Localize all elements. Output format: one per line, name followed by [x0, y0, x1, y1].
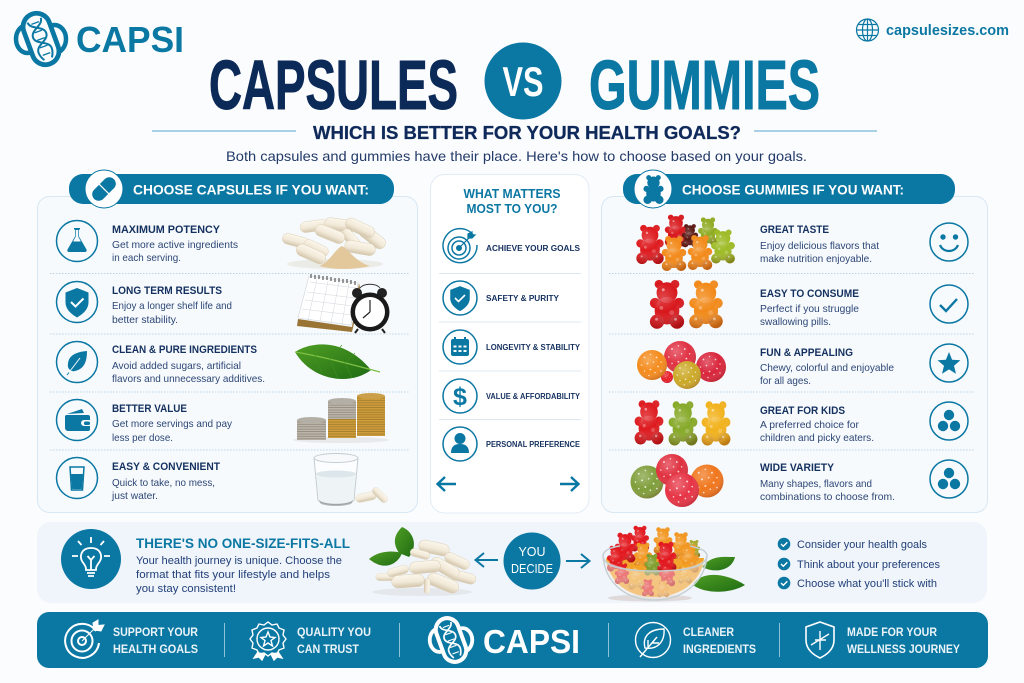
description: Enjoy a longer shelf life and: [112, 301, 232, 312]
row: great taste: [636, 215, 968, 271]
text: QUALITY YOU: [297, 627, 371, 639]
heading: GREAT TASTE: [760, 224, 829, 236]
label: VALUE & AFFORDABILITY: [486, 391, 580, 401]
check item: Consider your health goals: [797, 539, 927, 551]
text: CAN TRUST: [297, 644, 359, 656]
check item: Think about your preferences: [797, 559, 940, 571]
description: [112, 301, 232, 326]
description: [760, 363, 894, 387]
check item: Choose what you'll stick with: [797, 578, 937, 590]
description: just water.: [111, 491, 158, 502]
icon: target: [443, 229, 477, 263]
image: capsules with leaves: [369, 527, 477, 596]
icon: leaf in circle: [636, 622, 670, 658]
icon: person: [443, 427, 477, 461]
description: combinations to choose from.: [760, 492, 895, 503]
panel heading: WHAT MATTERS: [464, 187, 560, 201]
icon: calendar: [443, 330, 477, 364]
description: less per dose.: [112, 433, 173, 444]
logo wordmark: CAPSI: [76, 19, 184, 60]
heading: FUN & APPEALING: [760, 347, 853, 359]
title: capsules vs gummies: [209, 42, 820, 124]
description: [111, 478, 215, 502]
image: glass and capsules: [314, 454, 389, 506]
website link: [856, 19, 1009, 41]
vs badge: VS: [502, 58, 544, 105]
footer logo: [430, 615, 580, 665]
description: children and picky eaters.: [760, 433, 874, 444]
logo mark: [430, 615, 472, 665]
panel header: choose gummies: [623, 170, 955, 208]
description: [112, 419, 233, 444]
item: personal preference: [443, 427, 580, 461]
description: Perfect if you struggle: [760, 304, 859, 315]
text: [847, 627, 960, 656]
description: [760, 241, 879, 265]
text: WELLNESS JOURNEY: [847, 644, 960, 656]
row: easy to consume: [650, 280, 968, 329]
you decide badge: YOU: [518, 545, 546, 559]
logo wordmark: CAPSI: [483, 623, 580, 660]
text: INGREDIENTS: [683, 644, 756, 656]
description: format that fits your lifestyle and helps: [136, 569, 331, 581]
vs badge: [484, 42, 562, 120]
item: safety and purity: [443, 281, 559, 315]
description: Quick to take, no mess,: [112, 478, 215, 489]
image: three gummy bears: [635, 400, 730, 446]
description: you stay consistent!: [136, 583, 236, 595]
item: longevity and stability: [443, 330, 580, 364]
heading: CLEAN & PURE INGREDIENTS: [112, 344, 257, 356]
subtitle: WHICH IS BETTER FOR YOUR HEALTH GOALS?: [313, 122, 741, 143]
panel heading: MOST TO YOU?: [466, 202, 558, 216]
item: value and affordability: [443, 379, 580, 413]
description: Your health journey is unique. Choose the: [136, 555, 342, 567]
icon: wallet: [56, 400, 98, 440]
description: [112, 361, 265, 385]
text: MADE FOR YOUR: [847, 627, 938, 639]
footer item: quality: [250, 622, 371, 660]
website text: capsulesizes.com: [886, 23, 1009, 39]
description: for all ages.: [760, 376, 811, 387]
description: make nutrition enjoyable.: [760, 254, 872, 265]
description: Get more servings and pay: [112, 419, 233, 430]
row: fun and appealing: [637, 341, 968, 389]
panel: you decide banner: [37, 522, 987, 603]
title word: gummies: GUMMIES: [589, 46, 820, 124]
description: Avoid added sugars, artificial: [112, 361, 241, 372]
icon: glass of water: [56, 458, 98, 498]
icon: smiley: [930, 223, 968, 261]
intro sentence: Both capsules and gummies have their place. Here's how to choose based on your goals.: [226, 148, 807, 164]
description: in each serving.: [112, 253, 181, 264]
icon: shield: [443, 281, 477, 315]
arrow: left: [438, 477, 456, 491]
logo: CAPSI: [16, 9, 184, 69]
you decide badge: [504, 532, 560, 590]
row: clean and pure: [56, 342, 380, 385]
heading: WIDE VARIETY: [760, 462, 835, 474]
checklist: [778, 538, 940, 590]
panel header: choose capsules: [69, 170, 394, 208]
description: [136, 555, 342, 595]
icon: globe: [856, 19, 878, 41]
footer banner: [37, 612, 988, 668]
image: gummy bear pile: [636, 215, 735, 271]
footer item: health goals: [65, 620, 199, 658]
arrow: toward capsules: [476, 553, 498, 567]
image: calendar and clock: [297, 274, 390, 333]
panel heading: [464, 187, 560, 216]
row: easy and convenient: [56, 454, 389, 506]
description: better stability.: [112, 315, 178, 326]
icon: dollar: $: [453, 383, 467, 411]
image: sugared gummies variety: [630, 454, 724, 507]
footer item: wellness journey: [806, 622, 960, 658]
description: Many shapes, flavors and: [760, 479, 872, 490]
panel header: choose capsules: CHOOSE CAPSULES IF YOU WANT:: [133, 182, 369, 198]
icon: shield check: [56, 282, 98, 322]
panel header: choose gummies: CHOOSE GUMMIES IF YOU WANT:: [682, 182, 904, 198]
you decide badge: DECIDE: [511, 562, 553, 576]
heading: THERE'S NO ONE-SIZE-FITS-ALL: [136, 535, 350, 551]
item: achieve your goals: [443, 229, 580, 263]
panel: gummies: [602, 170, 988, 512]
label: SAFETY & PURITY: [486, 293, 559, 303]
icon: light bulb: [61, 529, 121, 589]
icon: shield: [806, 622, 834, 658]
description: swallowing pills.: [760, 317, 831, 328]
panel: what matters most: [430, 174, 589, 513]
image: coin stacks: [293, 393, 389, 443]
icon: leaf: [56, 342, 98, 382]
heading: LONG TERM RESULTS: [112, 285, 222, 297]
image: sugared gummies: [637, 341, 726, 389]
description: Chewy, colorful and enjoyable: [760, 363, 894, 374]
image: bowl of gummies: [603, 526, 745, 602]
text: [297, 627, 371, 656]
heading: GREAT FOR KIDS: [760, 405, 845, 417]
arrow: toward gummies: [566, 554, 590, 568]
description: [112, 240, 238, 264]
icon: check mark: [930, 285, 968, 323]
logo mark: [16, 9, 66, 69]
arrow: right: [560, 477, 578, 491]
text: [683, 627, 756, 656]
description: Get more active ingredients: [112, 240, 238, 251]
image: two gummy bears: [650, 280, 723, 329]
label: PERSONAL PREFERENCE: [486, 439, 580, 449]
description: [760, 479, 895, 503]
text: CLEANER: [683, 627, 735, 639]
icon: star: [930, 344, 968, 382]
heading: EASY TO CONSUME: [760, 288, 859, 300]
icon: target: [65, 620, 104, 658]
icon: badge: [250, 622, 286, 660]
heading: BETTER VALUE: [112, 403, 187, 415]
row: wide variety: [630, 454, 968, 507]
description: [760, 420, 874, 444]
icon: three circles: [930, 460, 968, 498]
label: LONGEVITY & STABILITY: [486, 342, 580, 352]
text: HEALTH GOALS: [113, 644, 198, 656]
description: Enjoy delicious flavors that: [760, 241, 879, 252]
image: capsule pile: [281, 216, 388, 269]
image: green leaf: [295, 344, 380, 379]
description: A preferred choice for: [760, 420, 860, 431]
heading: MAXIMUM POTENCY: [112, 224, 221, 236]
text: SUPPORT YOUR: [113, 627, 199, 639]
heading: EASY & CONVENIENT: [112, 461, 220, 473]
description: [760, 304, 859, 328]
row: long term results: [56, 274, 390, 333]
label: ACHIEVE YOUR GOALS: [486, 243, 580, 253]
title word: capsules: CAPSULES: [209, 46, 458, 124]
row: maximum potency: [56, 216, 388, 269]
icon: flask: [56, 220, 98, 262]
row: better value: [56, 393, 389, 444]
row: great for kids: [635, 400, 968, 446]
panel: capsules: [38, 170, 418, 512]
footer item: cleaner ingredients: [636, 622, 756, 658]
icon: three circles: [930, 402, 968, 440]
description: flavors and unnecessary additives.: [112, 374, 265, 385]
text: [113, 627, 199, 656]
